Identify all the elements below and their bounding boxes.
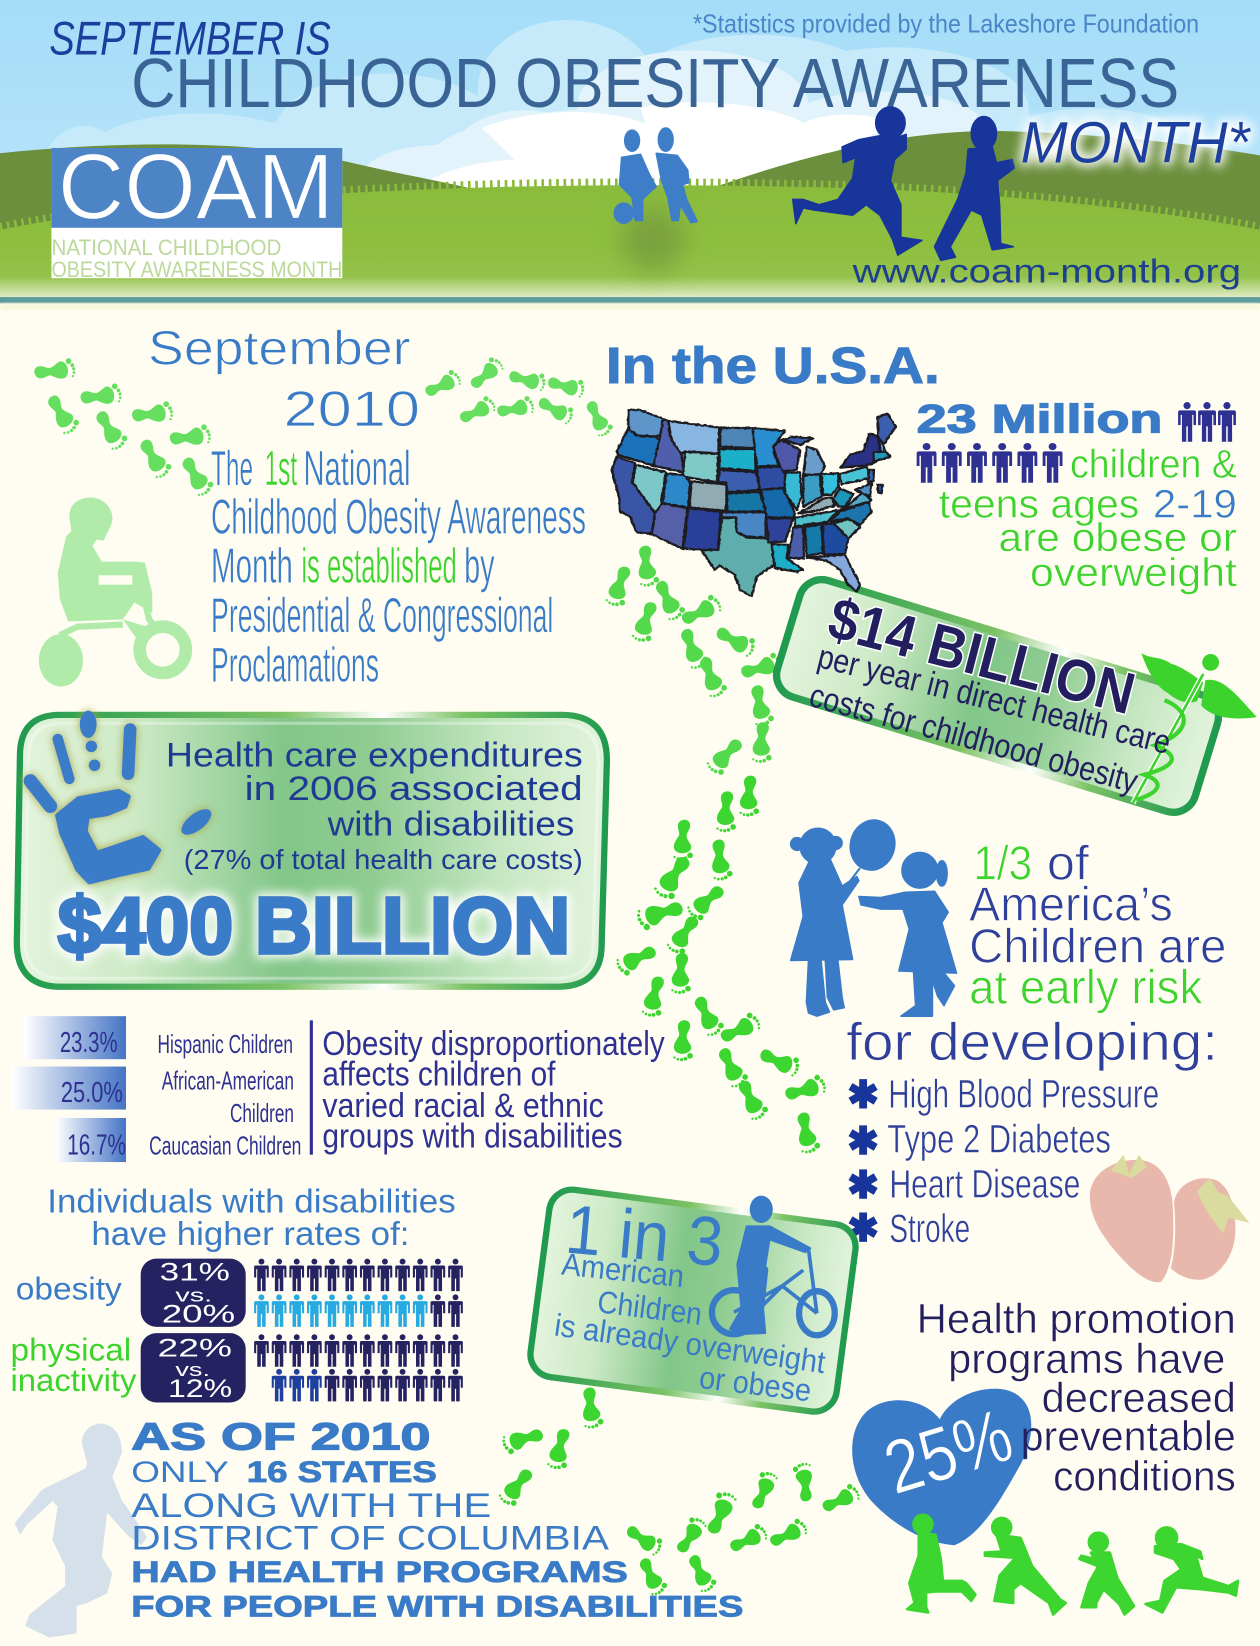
panel: $400 billion (17, 711, 607, 987)
text block: first national month: The (211, 441, 253, 496)
panel: $14 billion: $14 BILLION (822, 586, 1141, 727)
list: health risks: Type 2 Diabetes (887, 1118, 1111, 1162)
icon: strawberries (1090, 1155, 1250, 1282)
label: physical inactivity: physical (10, 1331, 131, 1367)
text block: as of 2010 (131, 1417, 743, 1624)
stat: 23 million children: 2-19 (1153, 483, 1237, 527)
icon: faded skating child (15, 1423, 147, 1638)
hills (0, 131, 1260, 299)
heading: Month: MONTH* (1021, 111, 1252, 176)
text block: as of 2010: AS OF 2010 (131, 1417, 431, 1459)
footprints: trail toward the U.S.A. (422, 355, 615, 439)
chart: obesity by ethnicity bars: 25.0% (61, 1077, 123, 1109)
panel: $400 billion: in 2006 associated (245, 770, 583, 808)
stat: 23 million children: 23 Million (917, 397, 1162, 441)
list: health risks: Stroke (889, 1207, 970, 1251)
text block: health promotion programs: conditions (1053, 1453, 1236, 1500)
logo: COAM: COAM (58, 134, 334, 238)
text block: first national month: 1st (265, 441, 297, 496)
panel: $400 billion: Health care expenditures (166, 736, 583, 774)
panel: $14 billion (771, 574, 1257, 818)
chart: obesity by ethnicity bars: 16.7% (67, 1130, 126, 1162)
badge: 22% vs 12%: vs. (175, 1360, 210, 1381)
label: obesity: obesity (16, 1271, 122, 1307)
logo: COAM: NATIONAL CHILDHOOD (51, 235, 281, 260)
panel: $14 billion: per year in direct health care (814, 638, 1174, 762)
icons: people row one (1178, 402, 1236, 442)
heading: September is: SEPTEMBER IS (49, 13, 331, 66)
text block: first national month: Childhood Obesity Awareness (211, 489, 586, 544)
panel: $400 billion: $400 BILLION (58, 881, 570, 970)
badge: 31% vs 20%: vs. (175, 1286, 212, 1307)
text block: one third of children: for developing: (846, 1013, 1218, 1072)
icon: two girls with balloon (791, 815, 957, 1016)
text block: first national month (211, 441, 586, 692)
stat: 23 million children (917, 397, 1237, 595)
text block: disproportionate obesity (322, 1025, 665, 1155)
text block: as of 2010: FOR PEOPLE WITH DISABILITIES (131, 1591, 743, 1624)
text block: as of 2010: ONLY (131, 1456, 229, 1489)
text block: disproportionate obesity: groups with disabilities (322, 1117, 623, 1155)
icon: blue handprint (30, 711, 216, 882)
text block: as of 2010: ALONG WITH THE (131, 1487, 491, 1525)
text block: one third of children: Children are (969, 920, 1226, 974)
list: health risks: High Blood Pressure (888, 1072, 1159, 1116)
icon: heart with 25 percent (852, 1389, 1031, 1545)
label: physical inactivity: inactivity (10, 1362, 137, 1398)
chart: inactivity people pictogram (254, 1334, 463, 1401)
panel: 1 in 3 children: 1 in 3 (563, 1190, 726, 1281)
footprints: trail below the map (605, 544, 784, 778)
text block: individuals with disabilities (47, 1183, 456, 1253)
chart: obesity by ethnicity bars (12, 1016, 313, 1162)
chart: obesity by ethnicity bars: Hispanic Children (158, 1029, 293, 1059)
footprints: centre trail (614, 776, 828, 1155)
icon: four green runners (907, 1515, 1238, 1615)
badge: 31% vs 20% (141, 1259, 246, 1329)
text block: first national month: National (303, 441, 411, 496)
logo: COAM: OBESITY AWARENESS MONTH (51, 257, 342, 282)
icon: two children running (793, 107, 1014, 260)
text block: disproportionate obesity: Obesity disproportionately (322, 1025, 665, 1063)
teal divider band (0, 297, 1260, 303)
chart: obesity by ethnicity bars: Caucasian Children (149, 1131, 301, 1161)
badge: 22% vs 12%: 12% (168, 1375, 232, 1403)
text block: one third of children: at early risk (969, 961, 1203, 1015)
text block: disproportionate obesity: varied racial & ethnic (322, 1087, 604, 1125)
badge: 22% vs 12%: 22% (158, 1334, 232, 1362)
text block: first national month: Month (211, 539, 293, 594)
panel: $400 billion: (27% of total health care costs) (184, 844, 583, 875)
text: preventable: preventable (1021, 1413, 1236, 1460)
text block: first national month: by (464, 539, 495, 594)
badge: 31% vs 20%: 20% (162, 1301, 235, 1329)
badge: 22% vs 12% (141, 1333, 246, 1403)
stat: 23 million children: overweight (1030, 551, 1237, 595)
text block: first national month: is established (301, 539, 457, 594)
panel: $14 billion: costs for childhood obesity (805, 677, 1142, 801)
icon: two children playing soccer (614, 128, 697, 223)
text block: September 2010: September (148, 321, 411, 375)
label: physical inactivity (10, 1331, 137, 1398)
panel: $400 billion: with disabilities (327, 806, 574, 844)
footprints: upper-left trail (33, 357, 216, 499)
chart: obesity by ethnicity bars: Children (230, 1098, 294, 1128)
heading: In the U.S.A.: In the U.S.A. (606, 336, 940, 394)
text block: health promotion programs (917, 1295, 1236, 1500)
text block: as of 2010: DISTRICT OF COLUMBIA (131, 1519, 610, 1557)
list: health risks: Heart Disease (889, 1163, 1080, 1207)
icon: child on tricycle (39, 497, 186, 687)
badge: 31% vs 20%: 31% (160, 1259, 230, 1287)
text block: disproportionate obesity: affects children of (322, 1055, 556, 1093)
text block: one third of children: 1/3 (973, 837, 1032, 891)
text block: health promotion programs: decreased (1042, 1374, 1236, 1421)
chart: obesity people pictogram (254, 1259, 463, 1327)
text block: one third of children (846, 837, 1226, 1072)
footprints: bottom trail (497, 1386, 862, 1598)
panel: 1 in 3 children: American (560, 1246, 686, 1294)
text block: one third of children: of (1047, 837, 1089, 891)
panel: 1 in 3 children: Children (596, 1283, 704, 1332)
text block: September 2010 (148, 321, 420, 437)
text block: first national month: Proclamations (211, 637, 379, 692)
text block: first national month: Presidential & Congressional (211, 588, 553, 643)
chart: obesity by ethnicity bars: 23.3% (60, 1027, 118, 1059)
text block: as of 2010: HAD HEALTH PROGRAMS (131, 1556, 628, 1589)
clouds (42, 20, 1208, 220)
icon: child with bicycle (712, 1196, 835, 1335)
text block: health promotion programs: Health promotion (917, 1295, 1236, 1342)
website address: www.coam-month.org (851, 253, 1241, 290)
stat: 23 million children: children & (1070, 443, 1237, 487)
chart: obesity by ethnicity bars: African-American (162, 1066, 294, 1096)
stat: 23 million children: are obese or (999, 516, 1237, 560)
text block: individuals with disabilities: Individuals with disabilities (47, 1183, 456, 1220)
text block: as of 2010: 16 STATES (247, 1456, 437, 1489)
list: health risks (850, 1072, 1159, 1251)
panel: header scene (0, 0, 1260, 310)
panel: 1 in 3 children: or obese (697, 1359, 813, 1408)
panel: 1 in 3 children: is already overweight (552, 1307, 828, 1380)
text block: September 2010: 2010 (284, 380, 420, 437)
logo: COAM (51, 134, 342, 282)
icon: caduceus (1133, 653, 1257, 803)
panel: 1 in 3 children (528, 1187, 858, 1414)
text block: one third of children: America’s (969, 878, 1173, 932)
note: statistics source: *Statistics provided by the Lakeshore Foundation (693, 9, 1199, 39)
icons: people row two (917, 443, 1062, 483)
text block: individuals with disabilities: have higher rates of: (91, 1216, 410, 1253)
stat: 23 million children: teens ages (939, 483, 1139, 527)
icon: heart with 25 percent: 25% (875, 1393, 1022, 1511)
text block: health promotion programs: programs have (948, 1335, 1225, 1382)
map: United States obesity rates (612, 410, 896, 597)
